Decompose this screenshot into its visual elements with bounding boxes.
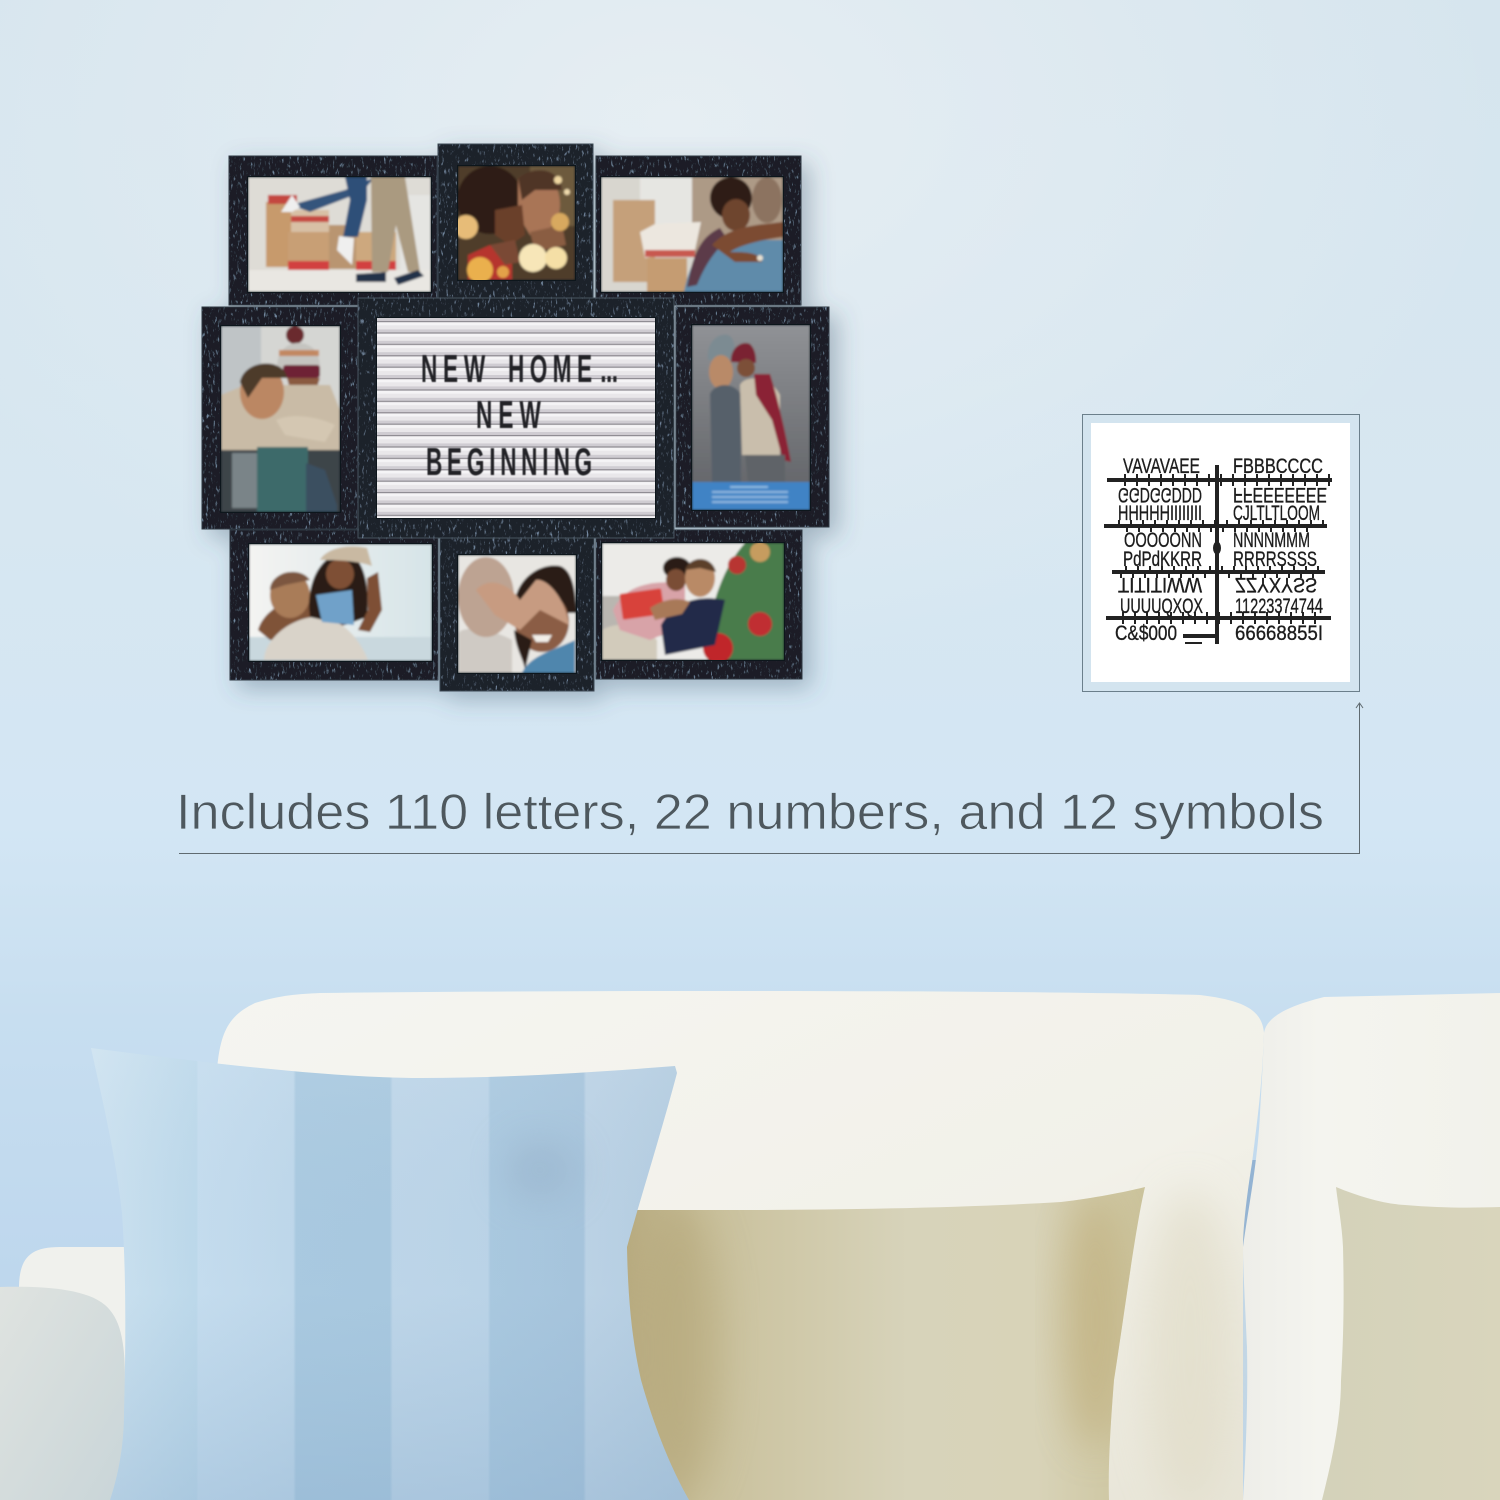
gray armrest left <box>0 1287 125 1500</box>
letter board panel <box>377 318 655 518</box>
letters, numbers and symbols: FFEEEEEEE <box>1233 483 1327 506</box>
sofa <box>0 991 1500 1500</box>
frame: center letter board <box>358 298 674 538</box>
gap behind cushions <box>1240 1160 1262 1250</box>
photo: piggyback at the beach <box>249 544 432 661</box>
letters, numbers and symbols: 11223374744 <box>1235 595 1323 618</box>
left seat edge <box>19 1247 260 1500</box>
photo: couple with bokeh lights <box>454 166 575 283</box>
sprue bars of letter set <box>1104 465 1332 644</box>
frame: top left <box>229 156 437 305</box>
photo: couple hugging with boxes <box>601 177 783 292</box>
letters, numbers and symbols: OOOOONN <box>1124 529 1202 552</box>
letters, numbers and symbols: 66668855I <box>1235 622 1323 645</box>
frame: middle left <box>202 307 358 529</box>
caption text: Includes 110 letters, 22 numbers, and 12 symbols <box>176 784 1324 840</box>
collage frame product <box>202 144 829 691</box>
letters, numbers and symbols: RRRRSSSS <box>1233 548 1317 571</box>
letters, numbers and symbols: GGDGGDDD <box>1118 483 1202 506</box>
inset white card <box>1091 423 1350 682</box>
letters, numbers and symbols: ZZYXYSS <box>1235 573 1317 596</box>
letters, numbers and symbols: FBBBCCCC <box>1233 455 1323 478</box>
letters, numbers and symbols: HHHHHIIIIIIII <box>1118 502 1202 525</box>
letters, numbers and symbols: VAVAVAEE <box>1123 455 1200 478</box>
felt slat background <box>377 318 655 518</box>
letters, numbers and symbols: CJLTLTLOOM <box>1233 502 1320 525</box>
letter board message: NEW HOME... <box>421 347 618 391</box>
frame: bottom right <box>596 530 802 679</box>
frame group with drop shadow <box>202 144 829 691</box>
right back cushion <box>1243 993 1500 1500</box>
letters, numbers and symbols <box>1115 455 1327 645</box>
letters, numbers and symbols: NNNNMMM <box>1233 529 1310 552</box>
letter set inset image <box>1082 414 1360 692</box>
frame: top center <box>438 144 593 300</box>
frame: bottom left <box>230 530 438 680</box>
letter board message: NEW <box>476 393 541 437</box>
blue striped pillow <box>85 1040 695 1500</box>
letters, numbers and symbols: TITITIWW <box>1118 573 1202 596</box>
photo: couple on gray backdrop with blue label <box>692 325 810 510</box>
letter board message <box>421 347 618 484</box>
letter board message: BEGINNING <box>426 440 592 484</box>
main back cushion <box>200 991 1264 1500</box>
letters, numbers and symbols: C&$000 <box>1115 622 1177 645</box>
photo: couple legs and moving boxes <box>248 177 431 292</box>
tan pillow right <box>1322 1187 1500 1500</box>
letters, numbers and symbols: PdPdKKRR <box>1123 548 1202 571</box>
photo: woman on man's back in winter hats <box>221 326 340 512</box>
tan pillow center <box>625 1180 1155 1500</box>
frame: bottom center <box>440 538 594 691</box>
letters, numbers and symbols: UUUUQXQX <box>1120 595 1203 618</box>
cushion soiled tone <box>1145 1190 1235 1500</box>
photo: couple with gift and christmas tree <box>602 542 784 663</box>
frame: top right <box>596 156 801 305</box>
inset outline <box>1082 414 1360 692</box>
frame: middle right <box>676 307 829 527</box>
arrow connector from caption to inset <box>179 703 1363 854</box>
photo: couple making hearts with hands <box>458 555 576 673</box>
